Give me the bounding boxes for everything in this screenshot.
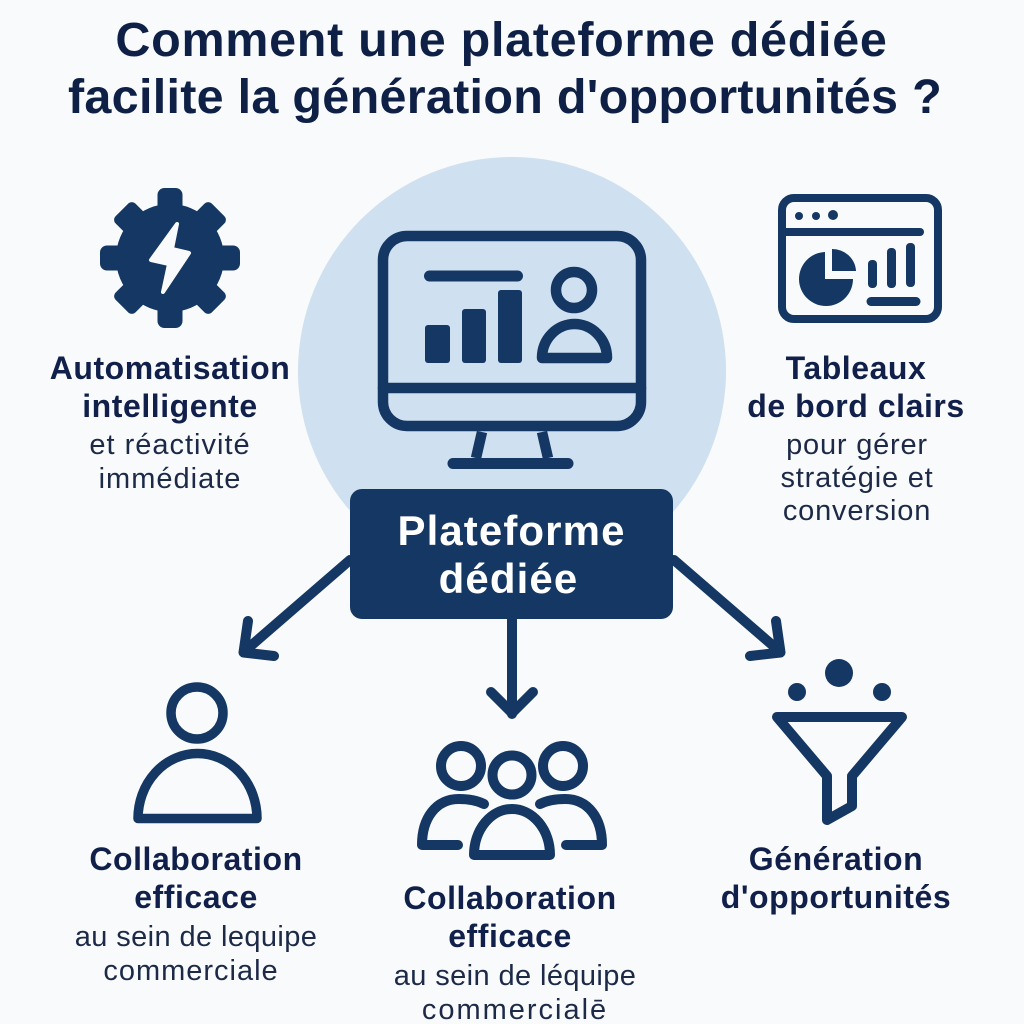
heading: collaboration left: efficace [134, 879, 258, 915]
text: automatisation: immédiate [99, 463, 241, 495]
panel: automatisation [50, 188, 290, 495]
heading: generation: Génération [749, 841, 923, 877]
heading: collaboration left: Collaboration [89, 841, 303, 877]
arrow: to left [238, 555, 350, 661]
title: Comment une plateforme dédiée [115, 13, 888, 67]
title: facilite la génération d'opportunités ? [68, 70, 942, 124]
heading: automatisation: intelligente [82, 388, 258, 424]
arrow: down [486, 619, 538, 719]
heading: generation: d'opportunités [721, 879, 951, 915]
heading: tableaux: Tableaux [786, 350, 926, 386]
heading: automatisation [50, 350, 290, 424]
icon: group of people [417, 741, 607, 860]
title [68, 13, 942, 124]
text: collaboration left: commerciale [103, 955, 279, 987]
text: collaboration center: au sein de léquipe [394, 960, 636, 992]
text: collaboration left [75, 921, 317, 987]
text: tableaux: stratégie et [780, 462, 934, 494]
text: tableaux: pour gérer [786, 429, 928, 461]
heading: tableaux [747, 350, 965, 424]
icon: dashboard window [778, 194, 942, 323]
panel: collaboration left [75, 682, 317, 987]
panel: generation [721, 659, 951, 915]
panel: collaboration center [394, 741, 636, 1024]
text: automatisation [89, 429, 251, 495]
central label box [350, 489, 673, 619]
central label box: Plateforme [397, 507, 626, 554]
heading: collaboration center [403, 880, 617, 954]
icon: gear with lightning bolt [100, 188, 240, 328]
icon: funnel with dots [772, 659, 907, 825]
heading: collaboration left [89, 841, 303, 915]
heading: generation [721, 841, 951, 915]
heading: tableaux: de bord clairs [747, 388, 965, 424]
icon: person [133, 682, 262, 824]
text: tableaux: conversion [783, 495, 931, 527]
text: tableaux [780, 429, 934, 527]
panel: tableaux de bord [747, 194, 965, 527]
icon: computer monitor [378, 230, 646, 469]
heading: collaboration center: Collaboration [403, 880, 617, 916]
central light circle [298, 157, 726, 512]
text: collaboration center [394, 960, 636, 1024]
heading: collaboration center: efficace [448, 918, 572, 954]
text: collaboration left: au sein de lequipe [75, 921, 317, 953]
text: automatisation: et réactivité [89, 429, 251, 461]
central label box: dédiée [439, 555, 578, 602]
heading: automatisation: Automatisation [50, 350, 290, 386]
arrow: to right [673, 555, 786, 661]
